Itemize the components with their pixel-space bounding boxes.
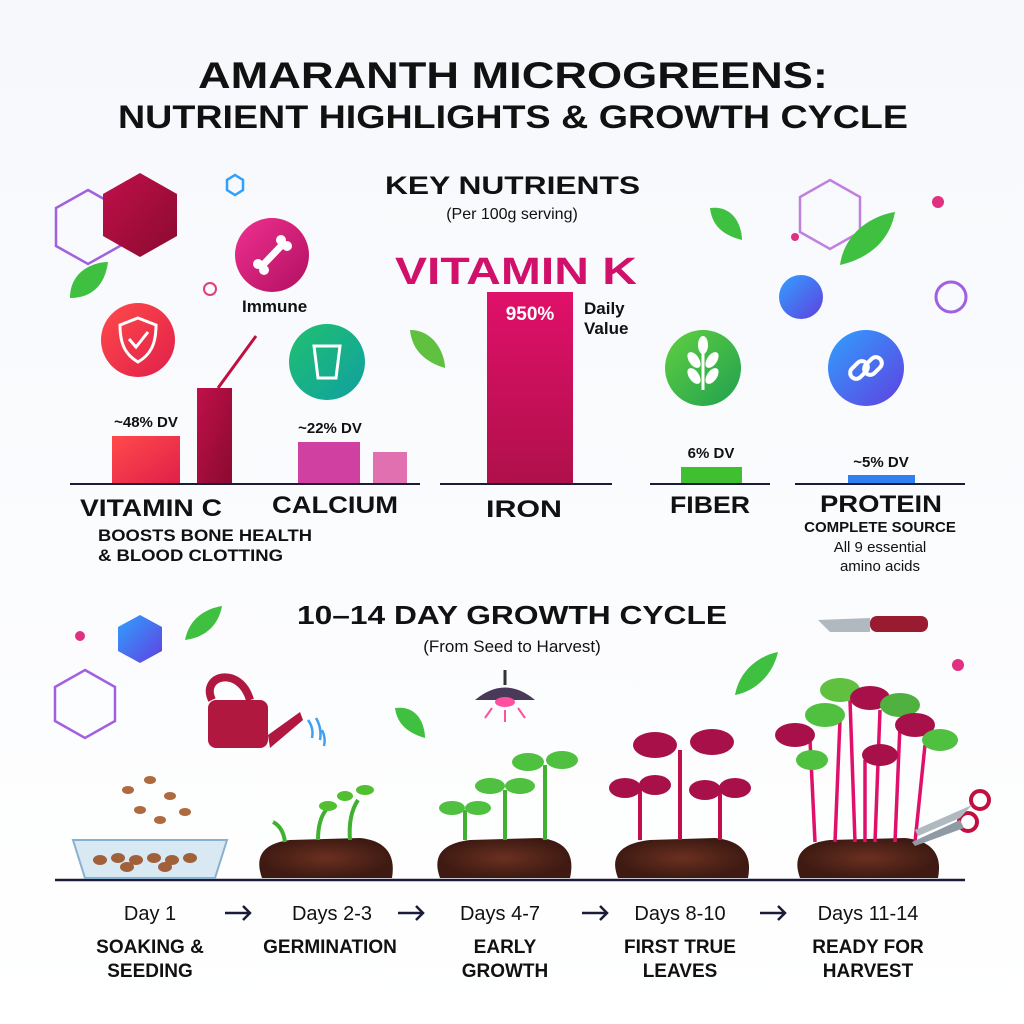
heading: growth cycle [297,600,727,656]
chart: vitamin K bar: Daily [584,299,625,318]
nutrient labels [80,491,956,575]
icon: hexagon vitamin K [103,173,177,257]
timeline labels: Days 8-10 [634,903,726,925]
icon: shield vitamin C [101,303,175,377]
stage names: SOAKING & [96,937,204,958]
heading: key nutrients [385,172,640,223]
decorative hexagons and dots [56,175,966,319]
chart: calcium bars: ~22% DV [298,420,362,437]
heading: key nutrients: KEY NUTRIENTS [385,172,640,200]
nutrient labels: All 9 essential [834,539,926,556]
stage 2: germination [259,785,393,878]
icon: grow lamp [475,670,535,722]
text: immune: Immune [242,297,307,316]
chart: fiber bar: 6% DV [688,445,734,462]
stage 3: early growth [437,751,578,878]
chart: vitamin C bars [112,336,256,483]
stage names: GERMINATION [263,937,397,958]
timeline labels: Days 2-3 [292,903,372,925]
icon: bone [235,218,309,292]
chart: vitamin C bars: ~48% DV [114,414,178,431]
stage names: GROWTH [462,961,548,982]
icon: knife [818,616,928,632]
heading: key nutrients: (Per 100g serving) [446,206,578,223]
chart: calcium bars [298,420,407,483]
chart: fiber bar [681,445,742,483]
timeline labels: Day 1 [124,903,176,925]
chart: vitamin K bar: 950% [506,304,554,325]
stage names: SEEDING [107,961,193,982]
icon: protein chain [828,330,904,406]
heading: growth cycle: (From Seed to Harvest) [423,637,601,656]
stage names: READY FOR [812,937,924,958]
decorative leaves [70,208,895,368]
stage 5: ready for harvest [775,678,958,878]
timeline labels: Days 11-14 [818,903,918,925]
stage names: FIRST TRUE [624,937,736,958]
stage names: EARLY [474,937,537,958]
icon: watering can [208,677,325,748]
nutrient labels: BOOSTS BONE HEALTH [98,526,312,545]
icon: cup calcium [289,324,365,400]
timeline line [55,879,965,881]
stage 1: seeds bowl [73,776,227,878]
nutrient labels: COMPLETE SOURCE [804,519,956,536]
nutrient labels: amino acids [840,558,920,575]
stage names [96,937,924,982]
nutrient labels: & BLOOD CLOTTING [98,546,283,565]
decorations lower [55,606,964,738]
title: AMARANTH MICROGREENS: [198,55,828,96]
chart: protein bar [848,454,915,483]
nutrient labels: CALCIUM [272,492,398,519]
timeline labels: Days 4-7 [460,903,540,925]
heading: vitamin K: VITAMIN K [395,251,638,293]
chart: protein bar: ~5% DV [853,454,909,471]
stage 4: first true leaves [609,729,751,878]
title: NUTRIENT HIGHLIGHTS & GROWTH CYCLE [118,99,908,135]
stage names: HARVEST [823,961,914,982]
chart: vitamin K bar: Value [584,319,628,338]
nutrient labels: PROTEIN [820,491,942,518]
heading: growth cycle: 10–14 DAY GROWTH CYCLE [297,600,727,630]
icon: scissors [912,791,989,846]
baselines [70,483,965,485]
chart: vitamin K bar [487,292,628,483]
title [118,55,908,135]
nutrient labels: VITAMIN C [80,495,222,522]
arrows [225,906,785,920]
stage names: LEAVES [643,961,717,982]
icon: fiber wheat [665,330,741,406]
nutrient labels: IRON [486,496,562,523]
nutrient labels: FIBER [670,492,750,519]
timeline labels [124,903,918,925]
